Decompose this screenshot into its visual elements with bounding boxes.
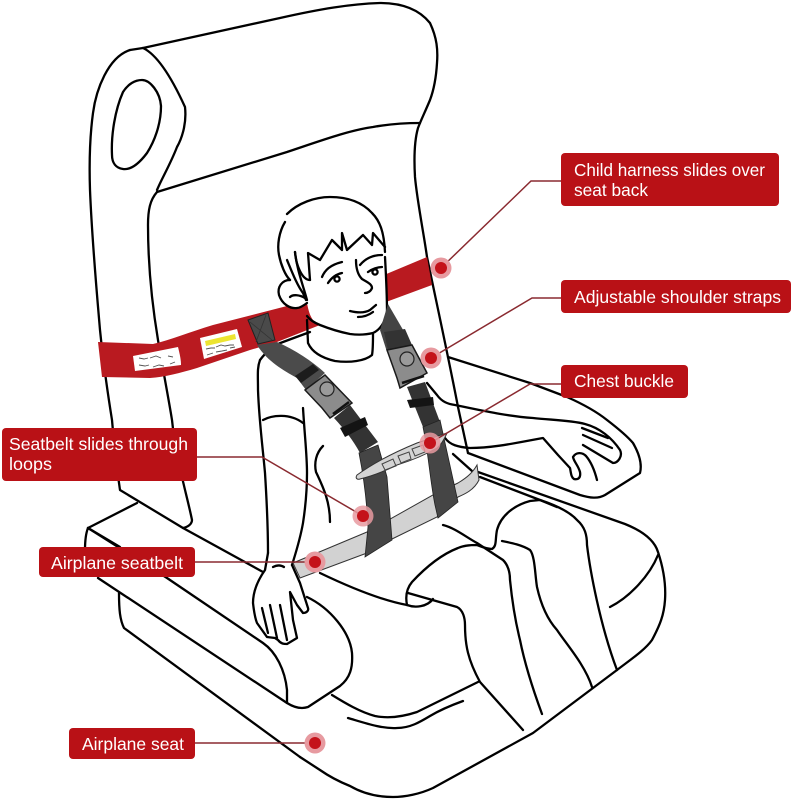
callout leader lines [195,181,562,743]
marker: airplane seatbelt [304,552,326,572]
label: airplane seatbelt [39,547,195,577]
right shoulder strap and buckle [380,304,458,518]
seat cushion [300,472,665,797]
marker: airplane seat [304,732,326,754]
left strap adjuster buckle [305,375,352,418]
label: airplane seat [69,728,195,759]
left armrest [85,503,352,757]
label: seatbelt slides through loops: loops [9,454,52,474]
marker: seatbelt loops [352,506,374,526]
label: seatbelt slides through loops: Seatbelt slides through [9,434,188,454]
left hand [253,553,308,644]
label: seatbelt slides through loops [2,428,197,481]
label: adjustable shoulder straps [561,280,791,313]
label: airplane seatbelt: Airplane seatbelt [51,553,183,573]
label: chest buckle: Chest buckle [574,371,674,391]
label: chest buckle [561,365,688,398]
label: airplane seat: Airplane seat [82,734,184,754]
head and face [278,197,387,335]
airplane seat outline [85,3,665,797]
yellow care label [200,329,242,359]
marker: chest buckle [420,432,440,454]
label: child harness slides over seat back [561,153,779,206]
marker: shoulder straps [420,348,442,368]
marker: harness over seat back [430,258,452,278]
torso and legs [258,320,621,730]
red harness band [98,257,432,378]
headrest and seat back [90,3,468,572]
chest buckle [356,433,447,479]
white care label [133,347,181,371]
child figure [253,197,621,730]
label: child harness slides over seat back: Child harness slides over [574,160,765,180]
label: adjustable shoulder straps: Adjustable shoulder straps [574,287,781,307]
label: child harness slides over seat back: seat back [574,180,648,200]
right strap adjuster buckle [387,345,427,388]
left shoulder strap and buckle [248,313,392,557]
right armrest [448,357,641,507]
airplane seatbelt webbing [293,465,479,578]
